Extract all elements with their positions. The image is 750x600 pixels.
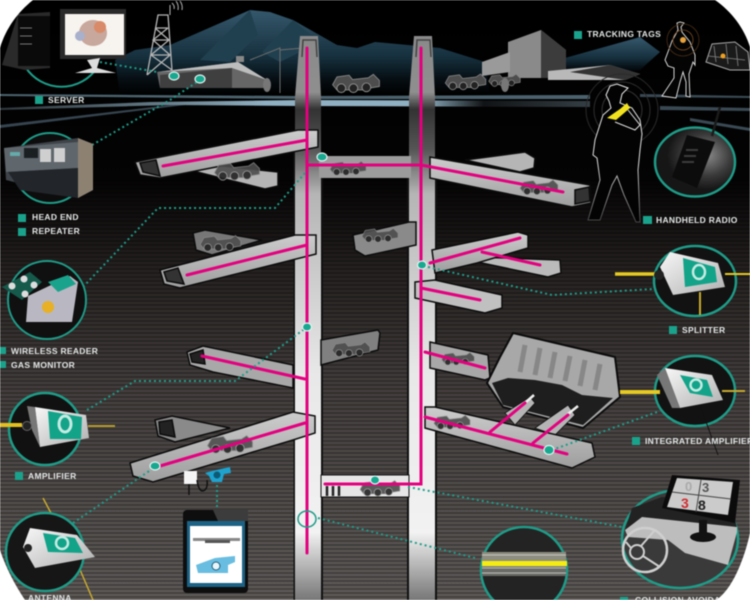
head end icon <box>4 133 93 203</box>
label: head end and repeater: REPEATER <box>32 226 80 236</box>
tablet <box>183 510 248 593</box>
label: head end and repeater: HEAD END <box>32 212 79 222</box>
pink network lines <box>160 48 568 553</box>
label: handheld radio: HANDHELD RADIO <box>656 215 738 225</box>
surface: building <box>157 48 303 93</box>
underground vehicles <box>200 161 558 496</box>
label: splitter: SPLITTER <box>682 325 726 335</box>
level tunnels left <box>130 130 380 482</box>
collision avoidance icon <box>622 475 740 588</box>
mountains <box>115 10 660 95</box>
shafts <box>294 36 437 600</box>
dotted teal connectors <box>73 62 657 558</box>
integrated amplifier icon <box>620 356 745 455</box>
hopper <box>425 333 620 468</box>
ground band <box>0 94 750 131</box>
sensor box and fan <box>184 467 231 495</box>
tracking tags label: TRACKING TAGS <box>587 29 661 39</box>
collision avoidance icon: 8 <box>698 497 706 513</box>
splitter icon <box>615 246 750 316</box>
worker with tracking tag <box>662 22 699 98</box>
collision avoidance icon: 3 <box>702 480 709 495</box>
fibre cable icon <box>481 527 567 600</box>
antenna icon <box>6 498 95 600</box>
handheld radio icon <box>655 107 735 196</box>
label: wireless reader and gas monitor: GAS MONITOR <box>11 360 75 370</box>
surface: tower <box>147 1 182 75</box>
signal nodes <box>150 72 554 484</box>
vehicle with tag <box>706 42 750 70</box>
ring marker on shaft <box>298 511 316 527</box>
worker with handheld radio <box>586 74 658 222</box>
label: wireless reader and gas monitor <box>0 346 98 370</box>
collision avoidance icon: 0 <box>685 479 692 494</box>
wireless reader icon <box>2 261 86 339</box>
label: head end and repeater <box>18 212 80 236</box>
connecting tunnels <box>319 156 411 497</box>
level tunnels right <box>353 152 591 380</box>
collision avoidance icon: 3 <box>681 495 689 511</box>
server icon <box>2 9 126 87</box>
surface: factory block <box>482 30 640 80</box>
amplifier icon <box>0 393 115 465</box>
miners in bottom tunnel <box>327 486 339 496</box>
label: wireless reader and gas monitor: WIRELESS READER <box>11 346 98 356</box>
surface: vehicles <box>263 74 520 93</box>
label: server: SERVER <box>48 95 85 105</box>
label: amplifier: AMPLIFIER <box>28 471 77 481</box>
